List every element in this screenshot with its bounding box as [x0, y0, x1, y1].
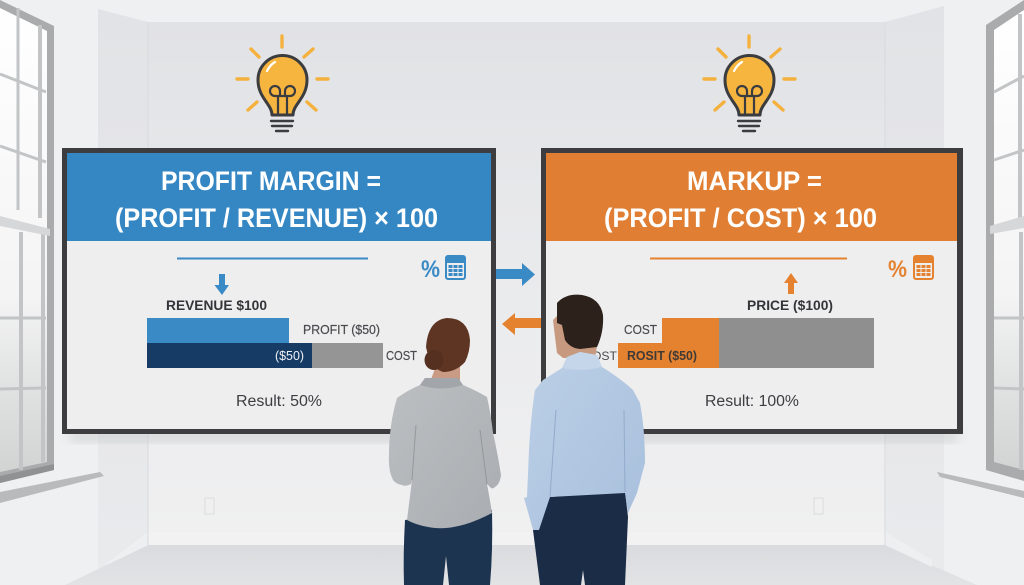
bar chart: revenue split: PROFIT ($50) [303, 323, 380, 337]
bar chart: revenue split [147, 318, 417, 368]
icon: percent and calculator [888, 256, 933, 283]
heading: markup formula: (PROFIT / COST) × 100 [604, 203, 877, 233]
icon: percent and calculator [421, 256, 465, 283]
bar chart: price split: ROSIT ($50) [627, 348, 697, 363]
bar chart: price split: COST [583, 351, 617, 363]
right window [937, 0, 1024, 498]
person: woman from behind [389, 318, 501, 585]
bar chart: revenue split: COST [386, 349, 417, 363]
hair [557, 295, 603, 349]
heading: profit margin formula: (PROFIT / REVENUE) × 100 [115, 203, 438, 233]
neck and face [553, 312, 598, 358]
heading: profit margin formula: PROFIT MARGIN = [161, 166, 381, 196]
bar chart: revenue split: ($50) [275, 349, 304, 363]
bar chart: price split: COST [624, 323, 657, 337]
shirt [524, 352, 645, 530]
icon: light bulb right [704, 36, 795, 131]
bar chart: price split [583, 318, 874, 368]
arrow: orange pointing left [502, 313, 541, 335]
icon: light bulb left [237, 36, 328, 131]
result: markup: Result: 100% [705, 393, 799, 410]
heading: markup formula: MARKUP = [687, 166, 822, 196]
label: price: PRICE ($100) [747, 297, 833, 313]
divider line [177, 258, 368, 260]
panel shadows [70, 430, 958, 442]
hair [426, 318, 470, 372]
arrow: up from price [784, 273, 798, 294]
panel: markup [541, 148, 963, 434]
trousers [404, 510, 492, 585]
label: revenue: REVENUE $100 [166, 297, 267, 313]
arrow: down to revenue [214, 274, 229, 295]
wall outlet left [205, 498, 214, 514]
arrow: blue pointing right [496, 263, 535, 286]
panel: profit margin [62, 148, 496, 434]
result: margin: Result: 50% [236, 393, 322, 410]
icon: percent and calculator: % [888, 256, 907, 283]
divider line [650, 258, 847, 260]
neck [430, 366, 460, 382]
hair bun [424, 350, 444, 370]
wall outlet right [814, 498, 823, 514]
shirt [389, 378, 501, 528]
left window [0, 0, 104, 503]
heading: markup formula [546, 153, 957, 241]
trousers [533, 491, 628, 585]
person: man from behind [524, 295, 645, 585]
icon: percent and calculator: % [421, 256, 440, 283]
heading: profit margin formula [67, 153, 491, 241]
